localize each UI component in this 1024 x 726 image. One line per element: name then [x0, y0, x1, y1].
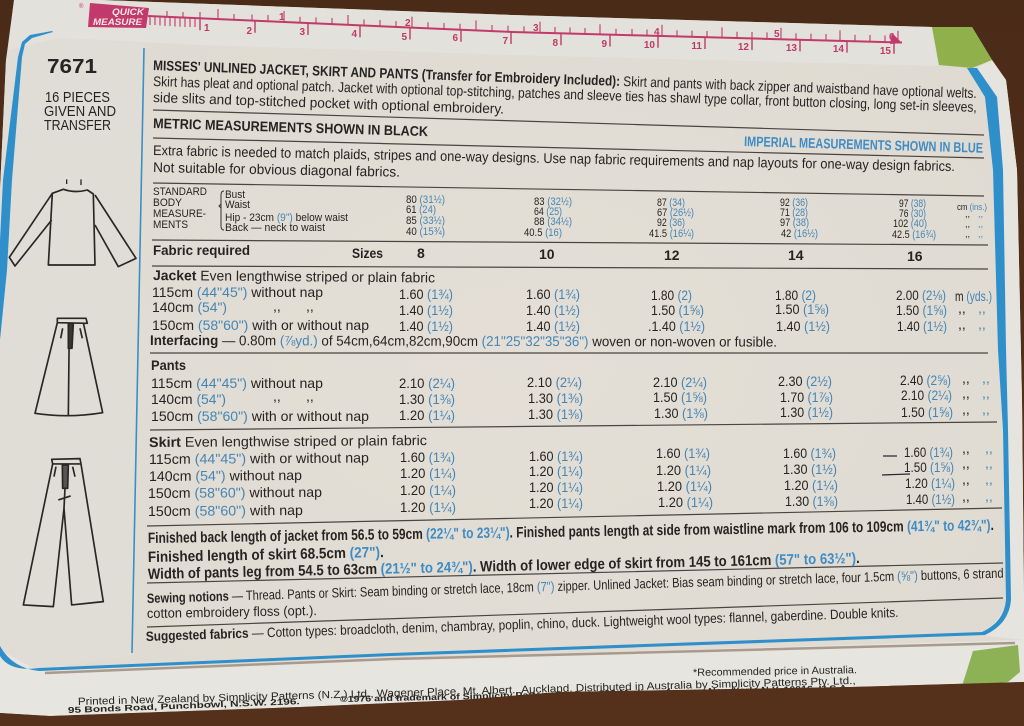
jacket section: 115cm (44"45") without nap: [152, 284, 323, 300]
pieces note: 16 PIECES: [45, 89, 110, 106]
description block: side slits and top-stitched pocket with optional embroidery.: [153, 89, 504, 117]
pieces note: [44, 89, 116, 134]
skirt values: [400, 440, 993, 515]
fabric required header row: 16: [907, 248, 923, 264]
jacket values: ,,: [978, 300, 986, 316]
jacket section: ,,: [306, 298, 314, 314]
pants values: ,,: [982, 385, 990, 401]
size 16 column: 102 (40): [893, 218, 927, 230]
pants values: 1.30 (1½): [780, 404, 833, 420]
green corner top right: [932, 27, 992, 68]
pants values: ,,: [982, 370, 990, 386]
skirt values: ,,: [962, 488, 970, 504]
units: ,,: [978, 219, 983, 229]
centimetre numbers: [204, 23, 891, 57]
centimetre numbers: 14: [833, 44, 844, 55]
finished measurements: [148, 517, 994, 583]
pants section: 115cm (44"45") without nap: [151, 375, 323, 391]
pattern number: 7671: [47, 56, 97, 78]
skirt values: 1.50 (1⅝): [904, 459, 954, 475]
size 16 column: 97 (38): [899, 198, 926, 210]
metric heading: METRIC MEASUREMENTS SHOWN IN BLACK: [153, 115, 428, 139]
pants section: 140cm (54"): [151, 391, 226, 407]
row headings: MEASURE-: [153, 208, 206, 220]
units: cm (ins.): [957, 202, 987, 213]
skirt values: 1.60 (1¾): [783, 445, 836, 461]
size 14 column: 71 (28): [780, 207, 808, 219]
size 8 column: 80 (31½): [406, 194, 445, 206]
icon: skirt: [35, 318, 103, 416]
pants values: 1.50 (1⅝): [653, 389, 707, 405]
skirt values: ,,: [962, 471, 970, 487]
skirt values: ,,: [962, 455, 970, 471]
fabric required header row: Fabric required: [153, 242, 250, 258]
centimetre numbers: 2: [246, 26, 252, 37]
pants values: ,,: [962, 370, 970, 386]
pants section: 150cm (58"60") with or without nap: [151, 408, 369, 424]
finished measurements: Width of pants leg from 54.5 to 63cm (21½" to 24¾"). Width of lower edge of skirt from 145 to 161cm (57" to 63½").: [148, 550, 860, 583]
fabric required header row: 8: [417, 245, 425, 261]
left margin paper: [0, 38, 144, 670]
jacket values: [399, 286, 992, 334]
pants values: 1.20 (1¼): [399, 407, 455, 423]
horizontal rules: [147, 110, 1003, 627]
pants values: 1.30 (1⅜): [528, 390, 583, 406]
jacket section: ,,: [273, 298, 281, 314]
size 14 column: 42 (16½): [781, 228, 818, 240]
skirt values: 1.20 (1¼): [400, 465, 456, 481]
inch numbers: [279, 12, 895, 43]
size 8 column: [406, 194, 445, 238]
jacket values: m (yds.): [955, 288, 992, 304]
jacket values: .1.40 (1½): [648, 318, 705, 334]
jacket values: 1.50 (1⅝): [651, 302, 704, 318]
pants values: 2.30 (2½): [778, 373, 832, 389]
right outer margin paper: [977, 60, 1024, 640]
vertical blue divider: [132, 48, 144, 653]
pants values: 2.40 (2⅝): [900, 372, 951, 388]
centimetre numbers: 4: [351, 29, 357, 40]
green corner bottom right: [962, 645, 1020, 686]
skirt values: ,,: [985, 471, 993, 487]
skirt values: 1.20 (1¼): [905, 475, 955, 491]
size 16 column: [892, 198, 936, 241]
size 10 column: [524, 196, 572, 239]
inch numbers: 2: [405, 18, 411, 29]
jacket section: [150, 267, 992, 350]
skirt section: [148, 432, 993, 519]
row headings: MENTS: [153, 219, 188, 231]
skirt values: ,,: [985, 440, 993, 456]
skirt values: 1.60 (1¾): [904, 444, 953, 460]
description block: MISSES' UNLINED JACKET, SKIRT AND PANTS (Transfer for Embroidery Included): Skirt and pants with back zipper and waistband have optional welts.: [153, 57, 977, 101]
footer print: ©1976 and trademark of Simplicity Pattern Co. Inc., 200 Madison Avenue, New York, N.Y. 10016, U.S.A.: [340, 683, 850, 704]
fabric required header row: 14: [788, 247, 804, 263]
fold shadow under the blue border: [45, 643, 1015, 673]
units: ,,: [965, 219, 970, 229]
pants values: 1.30 (1⅜): [654, 405, 708, 421]
centimetre numbers: 13: [786, 43, 797, 54]
jacket section: 150cm (58"60") with or without nap: [152, 317, 369, 333]
centimetre numbers: 6: [452, 33, 458, 44]
body measurements table: [153, 186, 987, 241]
skirt values: 1.20 (1¼): [400, 482, 456, 498]
ruler label: QUICK: [112, 7, 145, 18]
pants values: 1.50 (1⅝): [901, 404, 953, 420]
units: ,,: [965, 209, 970, 219]
row headings: Bust: [225, 189, 245, 201]
top flap strip: [8, 0, 938, 66]
pants values: [399, 370, 990, 423]
size 12 column: 41.5 (16¼): [649, 228, 694, 240]
size 14 column: [780, 197, 818, 240]
skirt values: ,,: [962, 440, 970, 456]
skirt values: 1.30 (1⅜): [785, 493, 838, 509]
jacket values: 1.40 (1½): [526, 318, 580, 334]
row headings: Back — neck to waist: [225, 222, 325, 234]
ruler label: [79, 3, 149, 28]
skirt values: 1.20 (1¼): [400, 499, 456, 515]
pants section: ,,: [306, 388, 314, 404]
inch numbers: 6: [889, 32, 895, 43]
size 14 column: 97 (38): [780, 217, 809, 229]
ruler label: MEASURE: [93, 17, 143, 28]
size 8 column: 85 (33½): [406, 215, 445, 227]
ruler label: ®: [79, 3, 84, 10]
size 12 column: 87 (34): [657, 197, 685, 209]
jacket values: 1.60 (1¾): [526, 286, 580, 302]
row headings: Waist: [225, 199, 250, 211]
jacket section: 140cm (54"): [152, 299, 227, 315]
fabric required header row: [153, 242, 923, 264]
jacket values: 1.40 (1½): [399, 318, 453, 334]
fabric required header row: 10: [539, 246, 555, 262]
skirt section: 115cm (44"45") with or without nap: [149, 449, 369, 467]
pants values: ,,: [962, 401, 970, 417]
centimetre numbers: 12: [738, 42, 749, 53]
pants values: 1.30 (1⅜): [399, 391, 455, 407]
footer print: Printed in New Zealand by Simplicity Patterns (N.Z.) Ltd., Wagener Place, Mt. Albert., Auckland, Distributed in Australia by Simplicity Patterns Pty. Ltd.,: [78, 675, 856, 708]
jacket values: 2.00 (2⅛): [896, 287, 946, 303]
centimetre numbers: 7: [502, 36, 508, 47]
skirt values: 1.40 (1½): [906, 491, 955, 507]
pants section: [151, 357, 990, 424]
suggested fabrics: Suggested fabrics — Cotton types: broadcloth, denim, chambray, poplin, chino, duck. Lightweight wool types: flannel, gaberdine. Double knits.: [146, 605, 899, 644]
garment illustrations: [9, 179, 136, 607]
fabric required header row: Sizes: [352, 245, 383, 261]
size 14 column: 92 (36): [780, 197, 808, 209]
inch numbers: 3: [533, 23, 539, 34]
size 10 column: 40.5 (16): [524, 227, 562, 239]
pants section: ,,: [273, 388, 281, 404]
pants values: ,,: [962, 385, 970, 401]
icon: jacket: [9, 179, 136, 267]
jacket values: 1.40 (1½): [897, 318, 947, 334]
jacket values: 1.40 (1½): [399, 302, 453, 318]
skirt values: 1.20 (1¼): [656, 462, 711, 478]
skirt values: 1.20 (1¼): [529, 495, 583, 511]
ruler line and ticks: [150, 9, 898, 42]
size 12 column: [649, 197, 694, 240]
pants values: 2.10 (2¼): [653, 374, 707, 390]
pants values: 1.30 (1⅜): [528, 406, 583, 422]
skirt section: 150cm (58"60") without nap: [148, 484, 322, 501]
centimetre numbers: 10: [644, 40, 655, 51]
pants values: 1.70 (1⅞): [780, 389, 833, 405]
bottom flap strip: [0, 640, 1024, 716]
centimetre numbers: 5: [401, 32, 407, 43]
centimetre numbers: 3: [299, 27, 305, 38]
sewing notions: Sewing notions — Thread. Pants or Skirt: Seam binding or stretch lace, 18cm (7") zipper. Unlined Jacket: Bias seam binding or stretch lace, four 1.5cm (⅝") buttons, 6 strand: [147, 566, 1004, 606]
inch numbers: 5: [774, 29, 780, 40]
skirt values: ,,: [985, 488, 993, 504]
skirt section: 150cm (58"60") with nap: [148, 502, 303, 519]
jacket section: Jacket Even lengthwise striped or plain fabric: [153, 267, 435, 285]
jacket values: 1.80 (2): [775, 287, 816, 303]
jacket values: 1.80 (2): [651, 287, 692, 303]
finished measurements: Finished back length of jacket from 56.5 to 59cm (22¼" to 23¼"). Finished pants length at side from waistline mark from 106 to 109cm (41¾" to 42¾").: [148, 517, 994, 547]
size 10 column: 83 (32½): [534, 196, 572, 208]
units: [957, 202, 987, 239]
inch numbers: 4: [654, 27, 660, 38]
jacket values: ,,: [978, 316, 986, 332]
pants section: Pants: [151, 357, 186, 373]
quick measure ruler: [79, 3, 902, 57]
skirt values: 1.20 (1¼): [529, 479, 583, 495]
jacket values: ,,: [958, 316, 966, 332]
size 8 column: 61 (24): [406, 204, 436, 216]
sewing notions: cotton embroidery floss (opt.).: [147, 603, 317, 621]
pants values: 2.10 (2¼): [399, 375, 455, 391]
wood foreground clipping the envelope bottom: [0, 682, 1024, 726]
skirt values: 1.60 (1¾): [656, 445, 710, 461]
fabric required header row: 12: [664, 247, 680, 263]
size 10 column: 88 (34½): [534, 216, 572, 228]
inch numbers: 1: [279, 12, 285, 23]
units: ,,: [978, 209, 983, 219]
size 16 column: 76 (30): [899, 208, 926, 220]
row headings: BODY: [153, 197, 183, 209]
skirt values: 1.30 (1½): [783, 461, 837, 477]
pieces note: GIVEN AND: [44, 103, 116, 120]
centimetre numbers: 15: [880, 46, 891, 57]
jacket values: ,,: [958, 300, 966, 316]
centimetre numbers: 11: [691, 41, 702, 52]
centimetre numbers: 9: [601, 39, 607, 50]
size 8 column: 40 (15¾): [406, 226, 445, 238]
footer print: 95 Bonds Road, Punchbowl, N.S.W. 2196.: [68, 696, 300, 715]
pieces note: TRANSFER: [44, 117, 111, 134]
size 12 column: 92 (36): [657, 217, 685, 229]
centimetre numbers: 1: [204, 23, 210, 34]
skirt values: 1.20 (1¼): [658, 494, 713, 510]
jacket values: 1.60 (1¾): [399, 286, 453, 302]
skirt values: 1.60 (1¾): [400, 449, 455, 465]
skirt section: Skirt Even lengthwise striped or plain fabric: [149, 432, 427, 450]
jacket values: 1.40 (1½): [776, 318, 830, 334]
skirt values: 1.20 (1¼): [784, 477, 838, 493]
fabric note: Extra fabric is needed to match plaids, stripes and one-way designs. Use nap fabric requirements and nap layouts for one-way design fabrics.: [153, 142, 955, 174]
units: ,,: [965, 229, 970, 239]
units: ,,: [978, 229, 983, 239]
pants values: 2.10 (2¼): [901, 387, 952, 403]
pants values: 2.10 (2¼): [527, 374, 582, 390]
pants values: ,,: [982, 401, 990, 417]
row headings: STANDARD: [153, 186, 207, 198]
skirt values: 1.20 (1¼): [657, 478, 712, 494]
jacket values: 1.50 (1⅝): [896, 302, 947, 318]
icon: pants: [23, 459, 103, 607]
footer print: [68, 664, 857, 715]
size 12 column: 67 (26½): [657, 207, 694, 219]
jacket values: 1.50 (1⅝): [775, 301, 829, 317]
finished measurements: Finished length of skirt 68.5cm (27").: [148, 544, 384, 566]
fabric note: Not suitable for obvious diagonal fabrics.: [153, 159, 400, 180]
skirt values: 1.60 (1¾): [529, 448, 583, 464]
interfacing note: Interfacing — 0.80m (⅞yd.) of 54cm,64cm,82cm,90cm (21"25"32"35"36") woven or non-woven or fusible.: [150, 332, 777, 350]
row headings: Hip - 23cm (9") below waist: [225, 212, 348, 224]
footer print: *Recommended price in Australia.: [693, 664, 857, 679]
size 16 column: 42.5 (16¾): [892, 229, 936, 241]
row headings: [153, 186, 348, 234]
centimetre numbers: 8: [552, 38, 558, 49]
skirt values: 1.20 (1¼): [529, 463, 583, 479]
jacket values: 1.40 (1½): [526, 302, 580, 318]
skirt values: ,,: [985, 455, 993, 471]
skirt section: 140cm (54") without nap: [149, 467, 302, 484]
size 10 column: 64 (25): [534, 206, 562, 218]
